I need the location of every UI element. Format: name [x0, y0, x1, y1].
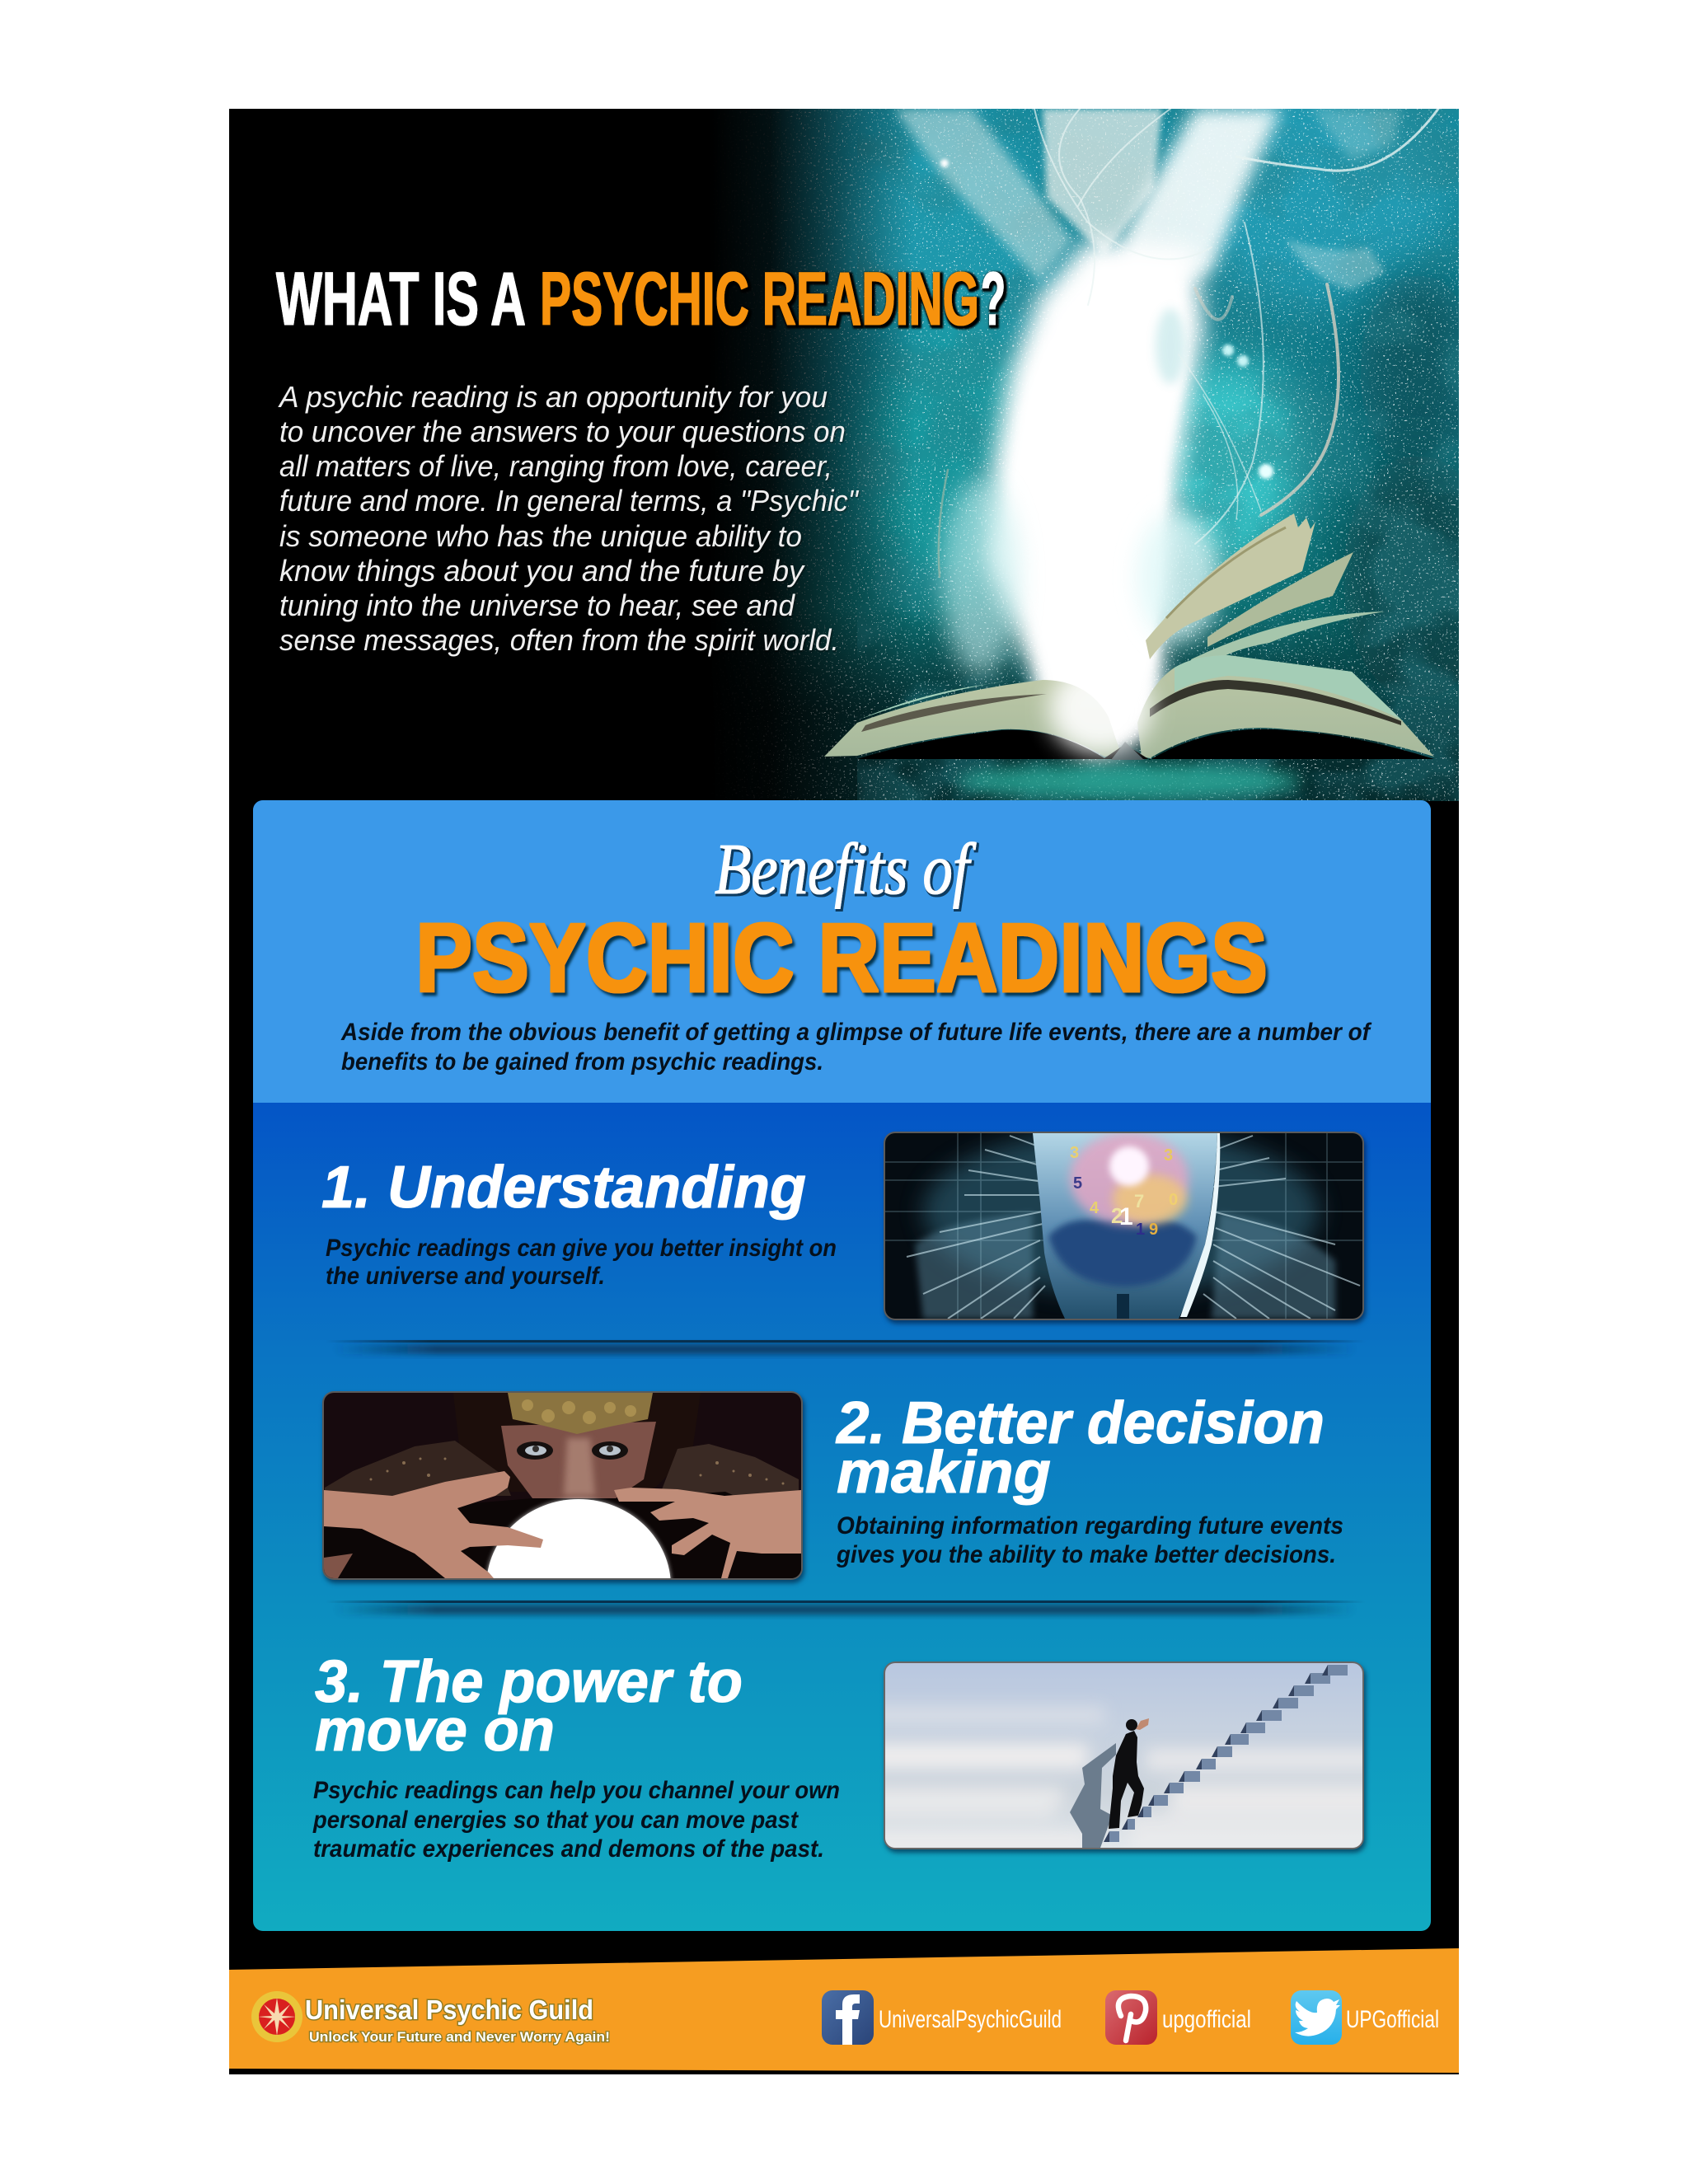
text block: hero description: is someone who has the unique ability to: [279, 519, 802, 553]
logo emblem: [251, 1991, 302, 2042]
social: twitter: UPGofficial: [1346, 2006, 1439, 2033]
image: glowing head: 1: [1119, 1203, 1133, 1230]
flying page a: [1146, 513, 1315, 659]
title: ?: [981, 257, 1006, 341]
left hand: [324, 1471, 543, 1578]
shoulders: [915, 1213, 1335, 1319]
text block: hero description: tuning into the universe to hear, see and: [279, 588, 795, 622]
black page background: [229, 109, 1459, 2074]
hero artwork: light column: [894, 109, 1401, 754]
benefit 2 heading: [835, 1390, 1325, 1506]
footer band: [229, 1948, 1459, 2073]
text block: hero description: A psychic reading is an opportunity for you: [278, 380, 828, 414]
left book block: [824, 680, 1121, 757]
icon: pinterest: [1105, 1990, 1157, 2045]
cloud bands: [857, 1708, 1393, 1848]
image: glowing head: 3: [1070, 1144, 1079, 1162]
benefit 3 text: [312, 1777, 840, 1863]
benefit 2 text: [836, 1512, 1343, 1568]
social: facebook: UniversalPsychicGuild: [879, 2006, 1062, 2033]
shadow under the book: [857, 729, 1434, 760]
climbing man: [1109, 1731, 1144, 1829]
social: facebook: [822, 1990, 1062, 2045]
text block: hero description: know things about you and the future by: [279, 554, 805, 588]
panel: benefits: [253, 800, 1431, 1931]
headband: [508, 1393, 653, 1434]
icon: twitter: [1291, 1990, 1342, 2045]
benefit 1 heading: 1. Understanding: [321, 1155, 806, 1221]
image: glowing head: 0: [1169, 1191, 1178, 1209]
social: pinterest: upgofficial: [1162, 2006, 1251, 2033]
benefit 3 text: traumatic experiences and demons of the past.: [313, 1835, 824, 1863]
right hand: [614, 1488, 801, 1578]
text block: intro: [340, 1019, 1372, 1076]
benefit 3 heading: [315, 1649, 743, 1764]
logo: Universal Psychic Guild: [251, 1991, 610, 2045]
right book block: [1137, 655, 1434, 758]
text block: hero description: [278, 380, 860, 657]
crystal ball: [486, 1499, 671, 1674]
title: WHAT IS A: [276, 257, 526, 341]
social: pinterest: [1105, 1990, 1251, 2045]
image: glowing head: 7: [1134, 1191, 1144, 1212]
text block: hero description: to uncover the answers to your questions on: [279, 415, 846, 448]
text block: intro: benefits to be gained from psychic readings.: [341, 1048, 823, 1076]
hair: [453, 1393, 701, 1492]
benefit 2 heading: making: [837, 1440, 1051, 1506]
heading: PSYCHIC READINGS: PSYCHIC READINGS: [415, 903, 1268, 1013]
social: twitter: [1291, 1990, 1439, 2045]
icon: open book: [824, 513, 1434, 760]
image: glowing head: 3: [1164, 1146, 1173, 1165]
image: glowing head: 4: [1090, 1199, 1100, 1217]
image: woman with crystal ball: [321, 1391, 808, 1586]
panel: hero with glowing book: [727, 109, 1459, 801]
burst of numbers: [1070, 1132, 1189, 1225]
text block: hero description: sense messages, often from the spirit world.: [279, 623, 839, 657]
benefit 3 heading: move on: [315, 1698, 555, 1764]
divider 1: [326, 1340, 1366, 1354]
benefit 1 text: the universe and yourself.: [326, 1263, 605, 1290]
benefit 1 text: [326, 1235, 837, 1290]
eyes: [517, 1441, 553, 1460]
logo tagline: Unlock Your Future and Never Worry Again!: [309, 2029, 610, 2045]
benefit 2 text: Obtaining information regarding future events: [837, 1512, 1343, 1540]
benefit 2 heading: 2. Better decision: [835, 1390, 1325, 1456]
shoulders: [325, 1441, 511, 1496]
benefit 2 text: gives you the ability to make better decisions.: [836, 1541, 1336, 1568]
head: [1033, 1133, 1217, 1319]
benefit 3 text: Psychic readings can help you channel your own: [313, 1777, 840, 1804]
subtitle: Benefits of: Benefits of: [715, 830, 977, 910]
benefit 1 text: Psychic readings can give you better insight on: [326, 1235, 837, 1262]
text block: hero description: future and more. In general terms, a "Psychic": [279, 484, 860, 518]
flying page b: [1207, 552, 1353, 647]
text block: hero description: all matters of live, ranging from love, career,: [279, 449, 832, 483]
text block: intro: Aside from the obvious benefit of getting a glimpse of future life events, there are a number of: [340, 1019, 1372, 1046]
image: glowing head: 5: [1073, 1174, 1082, 1193]
shadow figure: [1070, 1743, 1116, 1848]
title: [276, 257, 1006, 341]
benefit 3 heading: 3. The power to: [315, 1649, 743, 1715]
dark chest: [324, 1492, 801, 1578]
hero artwork: energy swirls: [939, 109, 1438, 577]
flying page c: [1191, 612, 1385, 660]
panel header background: [253, 800, 1431, 1103]
hero artwork: teal nebula background: [727, 109, 1459, 801]
stairs: [1109, 1665, 1348, 1842]
face: [501, 1422, 656, 1498]
image: glowing head: 2: [1111, 1203, 1123, 1228]
divider 2: [326, 1601, 1366, 1615]
icon: facebook: [822, 1990, 874, 2045]
image: man climbing stairs in the sky: [857, 1661, 1393, 1849]
image: glowing head: 9: [1149, 1221, 1158, 1239]
title: PSYCHIC READING: [540, 257, 979, 341]
logo wordmark: Universal Psychic Guild: [305, 1994, 593, 2025]
image: glowing head: 1: [1136, 1221, 1145, 1239]
benefit 3 text: personal energies so that you can move past: [312, 1807, 799, 1834]
image: glowing head: [884, 1129, 1364, 1320]
hero artwork: floor glow: [956, 763, 1302, 799]
